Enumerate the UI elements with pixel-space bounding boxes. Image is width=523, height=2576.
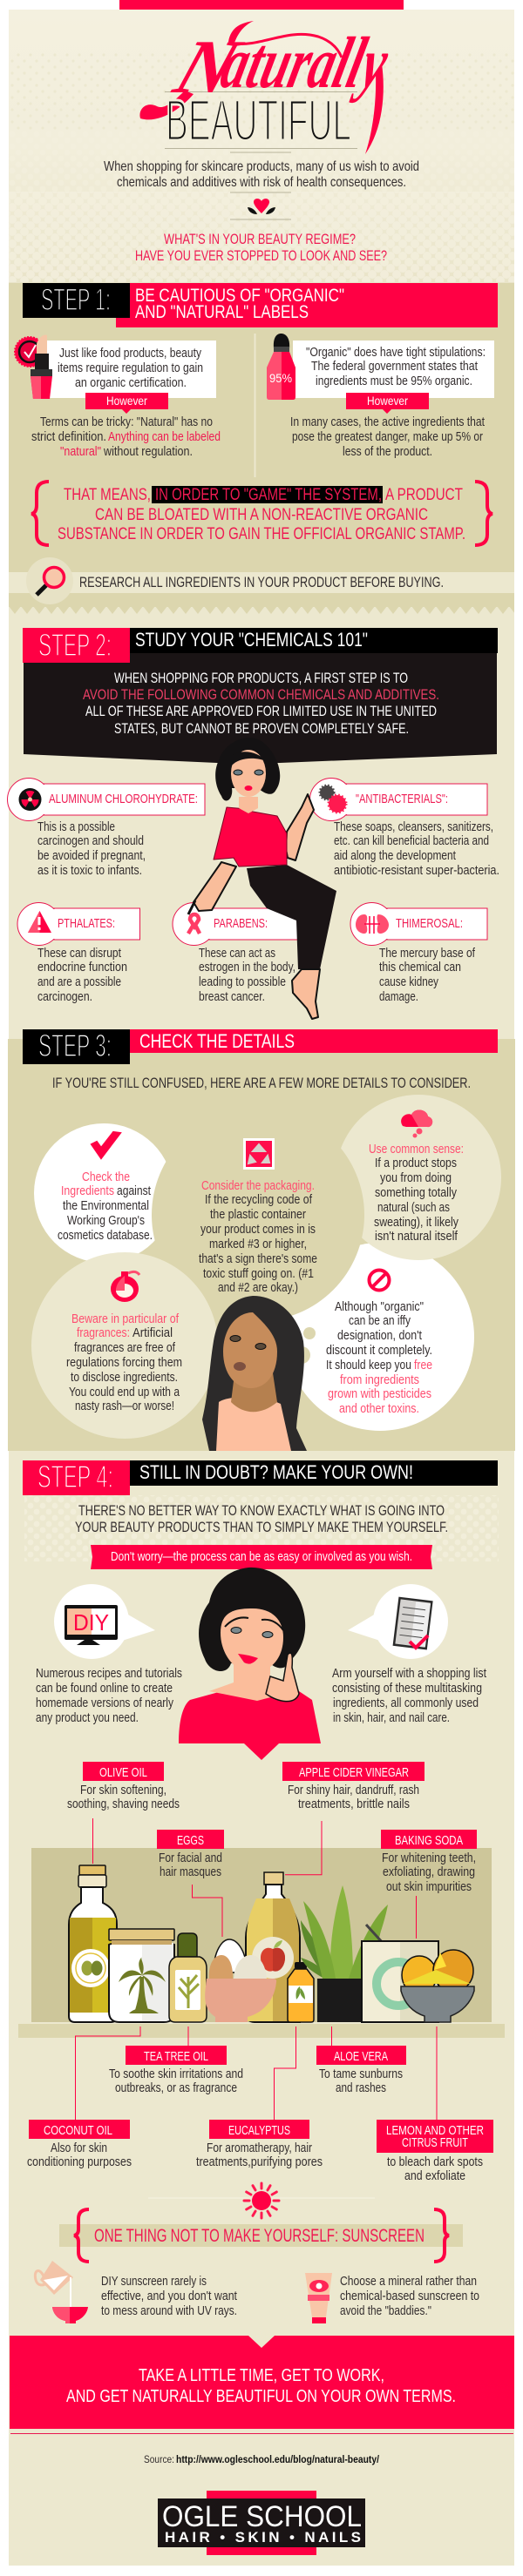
label: tea tree oil	[109, 2046, 243, 2095]
callout: pthalates: PTHALATES:	[58, 916, 115, 931]
illustration: woman with finger raised	[179, 1568, 321, 1743]
logo: ogle school: OGLE SCHOOL	[162, 2500, 362, 2533]
illustration: woman thinking	[202, 1296, 307, 1451]
label: tea tree oil: outbreaks, or as fragrance	[115, 2081, 237, 2095]
label: eggs: EGGS	[177, 1833, 204, 1848]
callout: pthalates: and are a possible	[37, 975, 121, 989]
step 2 heading: STUDY YOUR "CHEMICALS 101"	[135, 629, 368, 651]
bubble: organic not to discount: grown with pesticides	[328, 1387, 431, 1401]
bubble: fragrances: You could end up with a	[69, 1386, 180, 1399]
bubble: common sense: you from doing	[380, 1171, 452, 1185]
label: eucalyptus: EUCALYPTUS	[228, 2123, 290, 2138]
label: apple cider vinegar: APPLE CIDER VINEGAR	[299, 1765, 409, 1780]
heading: one thing not to make yourself	[59, 2209, 463, 2262]
text: DIY sunscreen: DIY sunscreen rarely is	[101, 2275, 207, 2289]
panel: right label 95 percent: The federal government states that	[311, 360, 478, 374]
illustration: woman seated	[188, 738, 336, 1019]
intro text	[104, 159, 419, 190]
banner: don't worry: Don't worry—the process can be as easy or involved as you wish.	[111, 1550, 412, 1564]
bubble: DIY recipes	[36, 1584, 182, 1725]
callout: thimerosal: damage.	[379, 990, 418, 1004]
callout: antibacterials: aid along the development	[334, 849, 456, 863]
text: DIY sunscreen: to mess around with UV rays.	[101, 2304, 237, 2318]
icon: heart and leaves	[248, 199, 275, 214]
bubble: fragrances: Beware in particular of	[71, 1312, 180, 1326]
illustration: eggs in bowl	[205, 1939, 276, 2022]
illustration: apple cider vinegar bottle	[246, 1872, 300, 2022]
step 3 heading: STEP 3:	[38, 1028, 112, 1063]
label: eucalyptus	[196, 2120, 323, 2169]
step 2 heading: STATES, BUT CANNOT BE PROVEN COMPLETELY SAFE.	[114, 720, 409, 737]
illustration: coconut oil jar	[109, 1929, 174, 2022]
icon: lipstick with seal	[15, 335, 52, 399]
label: olive oil: For skin softening,	[80, 1784, 166, 1797]
bubble: shopping list: ingredients, all commonly used	[333, 1696, 479, 1710]
bubble: common sense: If a product stops	[375, 1157, 457, 1170]
panel: left label regulation: items require regulation to gain	[58, 361, 203, 375]
label: olive oil: OLIVE OIL	[99, 1765, 147, 1780]
label: aloe vera: To tame sunburns	[319, 2067, 403, 2081]
source: http://www.ogleschool.edu/blog/natural-beauty/	[176, 2453, 380, 2465]
bubble: check the ingredients: Working Group's	[67, 1214, 145, 1228]
intro text: When shopping for skincare products, many of us wish to avoid	[104, 159, 419, 174]
step 1 heading: STEP 1:	[41, 283, 111, 317]
bubble: packaging: toxic stuff going on. (#1	[203, 1267, 314, 1281]
icon: sunscreen tube	[305, 2273, 332, 2323]
label: lemon and other citrus fruit: to bleach dark spots	[387, 2155, 483, 2169]
title: aturally	[214, 23, 397, 104]
icon: sun	[148, 2183, 375, 2218]
label: baking soda: exfoliating, drawing	[383, 1865, 475, 1879]
intro text: chemicals and additives with risk of health consequences.	[117, 175, 406, 190]
bubble: organic not to discount: from ingredients	[340, 1373, 419, 1387]
step 1 heading	[23, 283, 498, 327]
title	[139, 21, 397, 219]
label: eucalyptus: treatments,purifying pores	[196, 2155, 323, 2169]
panel: right label 95 percent: In many cases, the active ingredients that	[290, 415, 485, 429]
panel: left label regulation: Just like food products, beauty	[59, 347, 202, 361]
bubble: check the ingredients: Check the	[82, 1170, 130, 1184]
callout: parabens: estrogen in the body,	[199, 961, 295, 974]
illustration: citrus bowl	[401, 1950, 474, 2022]
bubble: shopping list: in skin, hair, and nail care.	[333, 1711, 450, 1725]
step 3 heading: CHECK THE DETAILS	[139, 1030, 295, 1052]
callout: aluminum chlorohydrate: be avoided if pregnant,	[37, 849, 146, 863]
label: tea tree oil: TEA TREE OIL	[144, 2049, 208, 2064]
illustration: tea tree oil bottle	[169, 1933, 207, 2022]
callout: pthalates: endocrine function	[37, 961, 127, 974]
shelf backdrop	[18, 1848, 505, 2038]
bubble: packaging: the plastic container	[210, 1208, 306, 1222]
label: lemon and other citrus fruit: LEMON AND OTHER	[386, 2123, 484, 2138]
step 1 heading: AND "NATURAL" LABELS	[135, 302, 309, 322]
callout: antibacterials: etc. can kill beneficial bacteria and	[334, 834, 489, 848]
label: lemon and other citrus fruit: CITRUS FRUIT	[402, 2135, 468, 2150]
step 3 heading	[23, 1028, 498, 1091]
panel: left label regulation	[31, 341, 221, 459]
bubble: organic not to discount: It should keep you	[326, 1359, 411, 1372]
bubble: organic not to discount: free	[414, 1359, 432, 1372]
bubble: check the ingredients: Ingredients	[61, 1184, 114, 1198]
panel: right label 95 percent: "Organic" does have tight stipulations:	[306, 346, 486, 360]
label: aloe vera: ALOE VERA	[334, 2049, 388, 2064]
callout: aluminum chlorohydrate	[7, 779, 205, 878]
bubble: DIY recipes: DIY	[73, 1609, 109, 1635]
label: aloe vera: and rashes	[336, 2081, 386, 2095]
callout: parabens: breast cancer.	[199, 990, 265, 1004]
bubble: common sense: something totally	[375, 1186, 458, 1200]
icon: pitcher and bowl	[35, 2261, 88, 2323]
icon: tube 95 percent	[267, 334, 295, 400]
step 2 heading	[23, 627, 498, 763]
illustration: baking soda box	[362, 1925, 438, 2022]
bubble: organic not to discount: can be an iffy	[349, 1314, 411, 1328]
step 4 heading: STILL IN DOUBT? MAKE YOUR OWN!	[139, 1461, 413, 1483]
panel: right label 95 percent: However	[367, 394, 408, 408]
callout: parabens: leading to possible	[199, 975, 286, 989]
callout: thimerosal: cause kidney	[379, 975, 439, 989]
callout: aluminum chlorohydrate: ALUMINUM CHLOROHYDRATE:	[49, 792, 198, 806]
label: coconut oil: COCONUT OIL	[44, 2123, 112, 2138]
bubble: fragrances: to disclose ingredients.	[71, 1371, 178, 1385]
step 2 heading: STEP 2:	[38, 627, 112, 663]
label: olive oil	[67, 1762, 180, 1811]
panel: left label regulation: However	[106, 394, 147, 408]
callout: aluminum chlorohydrate: This is a possible	[37, 820, 115, 834]
step 4 heading: STEP 4:	[37, 1459, 113, 1494]
bubble: check the ingredients: the Environmental	[63, 1199, 149, 1213]
panel: right label 95 percent: pose the greatest danger, make up 5% or	[292, 430, 483, 444]
callout: parabens: These can act as	[199, 947, 275, 961]
bubble: organic not to discount: and other toxins.	[339, 1402, 419, 1416]
callout: game the system: A PRODUCT	[385, 485, 463, 504]
callout: antibacterials: "ANTIBACTERIALS":	[356, 792, 448, 806]
callout: pthalates: These can disrupt	[37, 947, 121, 961]
banner: don't worry	[91, 1545, 432, 1569]
question heading	[135, 231, 387, 264]
callout: antibacterials: antibiotic-resistant super-bacteria.	[334, 864, 499, 878]
bubble: packaging: and #2 are okay.)	[218, 1281, 298, 1295]
bubble: fragrances: fragrances are free of	[74, 1341, 176, 1355]
label: baking soda: For whitening teeth,	[382, 1851, 476, 1865]
step 1 heading: BE CAUTIOUS OF "ORGANIC"	[135, 286, 344, 306]
callout: thimerosal: this chemical can	[379, 961, 461, 974]
bubble: organic not to discount: discount it completely.	[326, 1344, 432, 1358]
bubble: DIY recipes: can be found online to create	[36, 1682, 173, 1696]
callout: thimerosal: THIMEROSAL:	[396, 916, 463, 931]
bubble: organic not to discount: Although "organic"	[335, 1300, 424, 1314]
logo: ogle school	[158, 2491, 365, 2555]
text: mineral sunscreen: Choose a mineral rather than	[340, 2275, 477, 2289]
bubble: packaging: marked #3 or higher,	[209, 1237, 307, 1251]
illustration: small eucalyptus bottle	[288, 1962, 314, 2022]
text: mineral sunscreen: chemical-based sunscreen to	[340, 2289, 479, 2303]
title: BEAUTIFUL	[166, 88, 351, 153]
panel: left label regulation: "natural"	[60, 445, 101, 459]
question heading: WHAT'S IN YOUR BEAUTY REGIME?	[164, 231, 356, 247]
bubble: fragrances: fragrances:	[77, 1326, 130, 1340]
connector lines lower	[75, 2026, 437, 2120]
label: olive oil: soothing, shaving needs	[67, 1797, 180, 1811]
bubble: check the ingredients	[58, 1132, 153, 1243]
callout: parabens: PARABENS:	[214, 916, 268, 931]
closing call to action	[10, 2336, 514, 2433]
bubble: shopping list: consisting of these multitasking	[332, 1682, 482, 1696]
bubble: DIY recipes: Numerous recipes and tutorials	[36, 1667, 182, 1681]
label: eggs: hair masques	[160, 1865, 221, 1879]
label: eggs: For facial and	[159, 1851, 222, 1865]
label: coconut oil	[27, 2120, 132, 2169]
callout: game the system: THAT MEANS,	[64, 485, 151, 504]
title: N	[164, 24, 253, 109]
text: DIY sunscreen	[101, 2275, 237, 2318]
bubble: common sense: Use common sense:	[369, 1143, 464, 1157]
panel: right label 95 percent	[290, 341, 494, 459]
bubble: check the ingredients: against	[117, 1184, 151, 1198]
bubble: common sense: isn't natural itself	[375, 1230, 458, 1244]
callout: thimerosal: The mercury base of	[379, 947, 476, 961]
callout: aluminum chlorohydrate: carcinogen and should	[37, 834, 144, 848]
label: lemon and other citrus fruit	[377, 2120, 493, 2183]
bubble: common sense: natural (such as	[377, 1201, 450, 1215]
text: mineral sunscreen	[340, 2275, 479, 2318]
label: coconut oil: conditioning purposes	[27, 2155, 132, 2169]
bubble: fragrances	[66, 1271, 182, 1413]
panel: left label regulation: Anything can be labeled	[108, 430, 221, 444]
label: eggs	[157, 1830, 224, 1879]
callout: parabens	[173, 902, 305, 1004]
panel: left label regulation: an organic certification.	[75, 376, 187, 390]
text: DIY sunscreen: effective, and you don't want	[101, 2289, 237, 2303]
panel: left label regulation: Terms can be tricky: "Natural" has no	[40, 415, 213, 429]
divider	[255, 334, 256, 477]
label: baking soda	[381, 1830, 477, 1894]
label: aloe vera	[316, 2046, 406, 2095]
bubble: organic not to discount	[326, 1270, 432, 1416]
label: eucalyptus: For aromatherapy, hair	[207, 2141, 312, 2155]
bubble: shopping list: Arm yourself with a shopping list	[332, 1667, 486, 1681]
callout: thimerosal	[350, 902, 487, 1004]
icon: tube 95 percent: 95%	[269, 371, 292, 385]
panel: right label 95 percent: less of the product.	[343, 445, 432, 459]
label: apple cider vinegar: For shiny hair, dandruff, rash	[288, 1784, 419, 1797]
question heading: HAVE YOU EVER STOPPED TO LOOK AND SEE?	[135, 247, 387, 264]
callout: aluminum chlorohydrate: as it is toxic to infants.	[37, 864, 142, 878]
label: coconut oil: Also for skin	[51, 2141, 107, 2155]
bubble: common sense: sweating), it likely	[374, 1216, 459, 1230]
bubble: packaging: If the recycling code of	[205, 1193, 313, 1207]
bubble: packaging: your product comes in is	[200, 1223, 316, 1237]
bubble: DIY recipes: any product you need.	[36, 1711, 139, 1725]
panel: right label 95 percent: ingredients must be 95% organic.	[316, 374, 472, 388]
bubble: common sense	[369, 1109, 464, 1244]
illustration: olive oil bottle	[69, 1865, 117, 2022]
arrow: down to ingredients	[244, 1743, 279, 1760]
panel: detail bubbles	[31, 1095, 501, 1439]
bubble: fragrances: regulations forcing them	[66, 1356, 182, 1370]
bubble: check the ingredients: cosmetics database.	[58, 1229, 153, 1243]
logo: ogle school: HAIR • SKIN • NAILS	[165, 2529, 361, 2546]
text: mineral sunscreen: avoid the "baddies."	[340, 2304, 431, 2318]
step 2 heading: WHEN SHOPPING FOR PRODUCTS, A FIRST STEP IS TO	[114, 670, 408, 686]
label: apple cider vinegar	[282, 1762, 425, 1811]
bubble: organic not to discount: designation, don't	[337, 1329, 422, 1343]
closing call to action: TAKE A LITTLE TIME, GET TO WORK,	[139, 2366, 384, 2385]
panel: left label regulation: without regulation.	[103, 445, 193, 459]
callout: game the system	[31, 482, 492, 545]
illustration: aloe vera plant	[301, 1885, 388, 2022]
callout: pthalates	[17, 902, 139, 1004]
bubble: fragrances: Artificial	[132, 1326, 173, 1340]
callout: game the system: CAN BE BLOATED WITH A NON-REACTIVE ORGANIC	[95, 505, 428, 524]
bubble: packaging	[199, 1138, 317, 1295]
bubble: DIY recipes: homemade versions of nearly	[36, 1696, 174, 1710]
research band	[9, 557, 514, 604]
step 4 heading	[23, 1459, 498, 1535]
label: baking soda: BAKING SODA	[395, 1833, 463, 1848]
callout: pthalates: carcinogen.	[37, 990, 92, 1004]
bubble: packaging: that's a sign there's some	[199, 1252, 317, 1266]
label: lemon and other citrus fruit: and exfoliate	[404, 2169, 465, 2183]
label: baking soda: out skin impurities	[386, 1880, 472, 1894]
bubble: shopping list	[332, 1584, 486, 1725]
connector lines	[92, 1818, 417, 1939]
callout: game the system: IN ORDER TO "GAME" THE SYSTEM,	[155, 485, 382, 504]
source: Source:	[144, 2453, 174, 2465]
bubble: packaging: Consider the packaging.	[201, 1179, 315, 1193]
label: apple cider vinegar: treatments, brittle nails	[298, 1797, 410, 1811]
label: tea tree oil: To soothe skin irritations and	[109, 2067, 243, 2081]
panel: left label regulation: strict definition.	[31, 430, 106, 444]
callout: antibacterials	[310, 779, 499, 878]
bubble: fragrances: nasty rash—or worse!	[75, 1399, 174, 1413]
